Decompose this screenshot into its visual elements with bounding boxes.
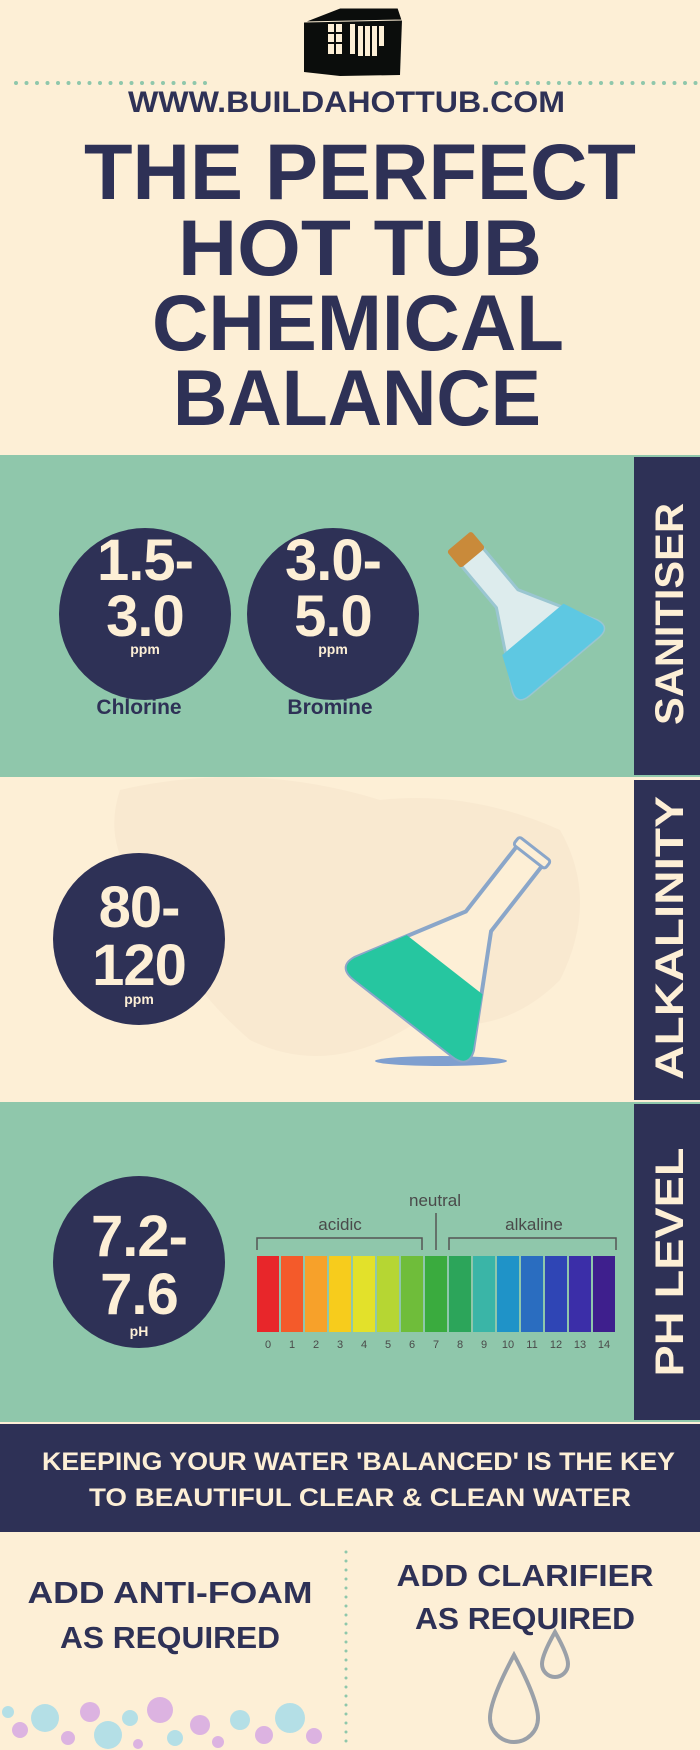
chart: ph scale: 9 (481, 1339, 487, 1351)
chart: ph scale: neutral (409, 1191, 461, 1210)
dotted divider (344, 1552, 348, 1745)
chart: ph scale: 2 (313, 1339, 319, 1351)
label: chlorine: Chlorine (96, 696, 182, 719)
panel: ph level (0, 1102, 700, 1422)
title: HOT TUB (178, 203, 542, 292)
circle: ph (53, 1176, 225, 1348)
banner: TO BEAUTIFUL CLEAR & CLEAN WATER (89, 1484, 631, 1512)
chart: ph scale: 12 (550, 1339, 562, 1351)
url: WWW.BUILDAHOTTUB.COM (128, 86, 565, 119)
chart: ph scale: 1 (289, 1339, 295, 1351)
circle: chlorine: 1.5- (97, 528, 193, 593)
icon: water drops (490, 1632, 568, 1742)
chart: ph scale: 14 (598, 1339, 610, 1351)
tab label: sanitiser: SANITISER (648, 503, 692, 725)
title: CHEMICAL (152, 278, 564, 367)
chart: ph scale: acidic (318, 1215, 362, 1234)
chart: ph scale: 3 (337, 1339, 343, 1351)
circle: ph: 7.6 (100, 1262, 178, 1327)
panel: alkalinity (0, 777, 700, 1102)
dotted line right (496, 81, 700, 85)
circle: chlorine (59, 528, 231, 700)
circle: alkalinity: 80- (99, 875, 179, 940)
chart: ph scale: 8 (457, 1339, 463, 1351)
label: bromine: Bromine (287, 696, 373, 719)
panel: sanitiser (0, 455, 700, 777)
circle: ph: 7.2- (91, 1204, 187, 1269)
chart: ph scale: 0 (265, 1339, 271, 1351)
circle: ph: pH (130, 1323, 148, 1339)
chart: ph scale: 4 (361, 1339, 367, 1351)
text: anti-foam (28, 1575, 312, 1655)
text: clarifier: AS REQUIRED (415, 1601, 635, 1636)
banner: KEEPING YOUR WATER 'BALANCED' IS THE KEY (42, 1448, 675, 1476)
circle: chlorine: ppm (130, 641, 160, 657)
chart: ph scale: 11 (526, 1339, 538, 1351)
circle: bromine: 3.0- (285, 528, 381, 593)
circle: bromine: ppm (318, 641, 348, 657)
chart: ph scale: 13 (574, 1339, 586, 1351)
tab label: ph level: PH LEVEL (648, 1148, 692, 1376)
icon: flask with cork (416, 505, 607, 702)
title: THE PERFECT (84, 127, 636, 216)
circle: bromine (247, 528, 419, 700)
chart: ph scale (257, 1191, 616, 1351)
icon: bubbles (2, 1697, 322, 1749)
title (84, 127, 636, 442)
text: anti-foam: ADD ANTI-FOAM (28, 1575, 312, 1610)
background map (114, 777, 580, 1056)
text: anti-foam: AS REQUIRED (60, 1620, 280, 1655)
icon: house logo (304, 8, 402, 76)
dotted line left (16, 81, 214, 85)
text: clarifier (396, 1558, 654, 1636)
circle: alkalinity: ppm (124, 991, 154, 1007)
circle: bromine: 5.0 (294, 584, 372, 649)
text: clarifier: ADD CLARIFIER (396, 1558, 654, 1593)
title: BALANCE (173, 353, 541, 442)
banner (0, 1424, 700, 1532)
circle: chlorine: 3.0 (106, 584, 184, 649)
chart: ph scale: 5 (385, 1339, 391, 1351)
circle: alkalinity (53, 853, 225, 1025)
chart: ph scale: 10 (502, 1339, 514, 1351)
chart: ph scale: 7 (433, 1339, 439, 1351)
chart: ph scale: alkaline (505, 1215, 563, 1234)
tab label: alkalinity: ALKALINITY (648, 796, 692, 1080)
icon: tilted flask (343, 802, 596, 1066)
chart: ph scale: 6 (409, 1339, 415, 1351)
circle: alkalinity: 120 (92, 933, 186, 998)
